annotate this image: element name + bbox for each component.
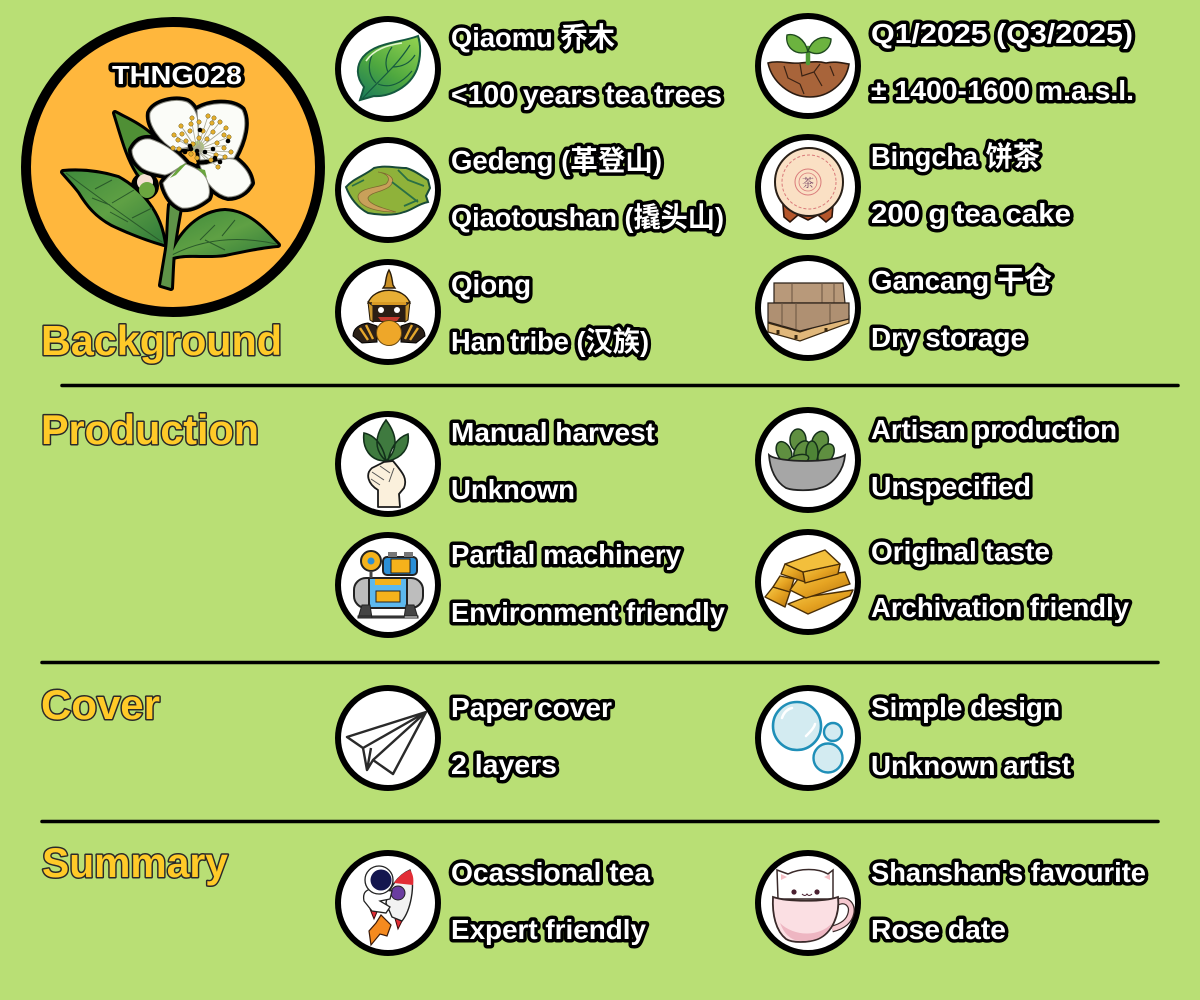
- label: tree age: <100 years tea trees: [451, 79, 722, 110]
- badge circle: [26, 22, 320, 312]
- item: Artisan production: [758, 410, 1117, 510]
- icon: machine: [338, 535, 438, 635]
- item: Partial machinery: [338, 535, 725, 635]
- label: Ocassional tea: Ocassional tea: [451, 857, 650, 888]
- label: Gedeng: Gedeng (革登山): [451, 145, 662, 176]
- label: Paper cover: Paper cover: [451, 692, 612, 723]
- item: Ocassional tea: [338, 853, 650, 953]
- icon: seedling in soil: [758, 16, 858, 116]
- item: Simple design: [758, 688, 1071, 788]
- divider: [62, 384, 1178, 387]
- label: Unknown: Unknown: [451, 474, 575, 505]
- label: harvest quarter: Q1/2025 (Q3/2025): [871, 18, 1133, 49]
- label: weight: 200 g tea cake: [871, 198, 1071, 229]
- label: layers: 2 layers: [451, 749, 557, 780]
- item: Shanshan's favourite: [758, 853, 1146, 953]
- icon: boxes on pallet: [758, 258, 858, 358]
- label: Archivation friendly: Archivation friendly: [871, 592, 1129, 623]
- label: Gancang: Gancang 干仓: [871, 265, 1052, 296]
- illustration: tea flower: [63, 100, 278, 288]
- label: Unknown artist: Unknown artist: [871, 750, 1071, 781]
- label: Simple design: Simple design: [871, 692, 1060, 723]
- label: Partial machinery: Partial machinery: [451, 539, 681, 570]
- label: Han tribe: Han tribe (汉族): [451, 326, 649, 357]
- label: Unspecified: Unspecified: [871, 471, 1031, 502]
- label: Manual harvest: Manual harvest: [451, 417, 655, 448]
- icon: tea cake on stand: [758, 137, 858, 237]
- item: Original taste: [758, 532, 1129, 632]
- label: Bingcha: Bingcha 饼茶: [871, 141, 1040, 172]
- heading: Background: Background: [41, 317, 282, 364]
- label: Artisan production: Artisan production: [871, 414, 1117, 445]
- heading: Cover: Cover: [41, 681, 160, 728]
- icon: cat in tea cup: [758, 853, 858, 953]
- icon: paper plane: [338, 688, 438, 788]
- divider: [42, 661, 1158, 664]
- item: Manual harvest: [338, 414, 655, 514]
- label: altitude: ± 1400-1600 m.a.s.l.: [871, 75, 1134, 106]
- item: Gancang: [758, 258, 1052, 358]
- emblem: tea flower badge: [26, 22, 320, 312]
- icon: hand holding leaves: [338, 414, 438, 514]
- item: Qiong: [338, 262, 649, 362]
- icon: astronaut on rocket: [338, 853, 438, 953]
- divider: [42, 820, 1158, 823]
- label: Original taste: Original taste: [871, 536, 1050, 567]
- icon: bowl of leaves: [758, 410, 858, 510]
- cake stamp: 茶: [802, 174, 814, 191]
- icon: gold bars: [758, 532, 858, 632]
- label: Qiaotoushan: Qiaotoushan (撬头山): [451, 202, 724, 233]
- label: Shanshan's favourite: Shanshan's favourite: [871, 857, 1146, 888]
- item: harvest date: [758, 16, 1134, 116]
- label: Qiaomu: Qiaomu 乔木: [451, 22, 615, 53]
- icon: guardian figure: [338, 262, 438, 362]
- icon: mountain terrain: [338, 140, 438, 240]
- label: Expert friendly: Expert friendly: [451, 914, 646, 945]
- heading: Summary: Summary: [42, 839, 229, 886]
- label: storage: Dry storage: [871, 322, 1026, 353]
- badge code: THNG028: [112, 60, 242, 90]
- label: Environment friendly: Environment friendly: [451, 597, 725, 628]
- icon: leaf: [338, 19, 438, 119]
- item: Gedeng: [338, 140, 724, 240]
- icon: bubbles: [758, 688, 858, 788]
- item: Qiaomu: [338, 19, 722, 119]
- item: Paper cover: [338, 688, 612, 788]
- label: Rose date: Rose date: [871, 914, 1006, 945]
- heading: Production: Production: [41, 406, 259, 453]
- item: Bingcha: [758, 137, 1071, 237]
- label: Qiong: Qiong: [451, 269, 531, 300]
